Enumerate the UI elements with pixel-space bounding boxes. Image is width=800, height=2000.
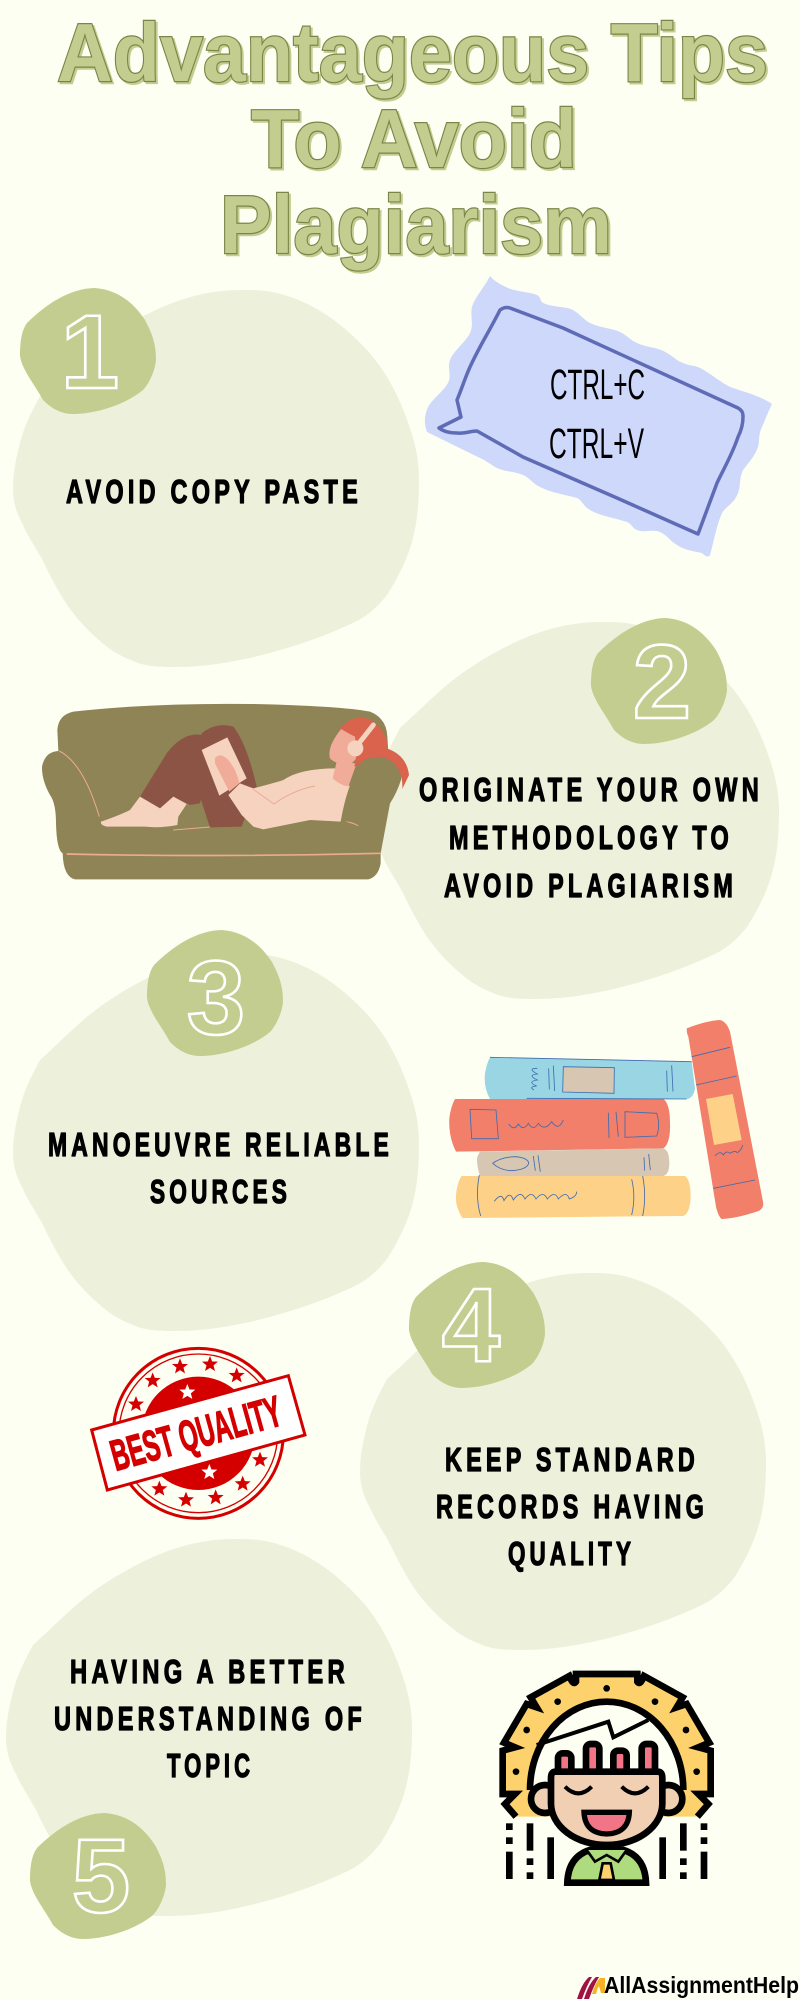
panel: tip 2 (373, 618, 779, 999)
icon: best quality stamp (92, 1348, 305, 1518)
panel: tip 4 (360, 1262, 766, 1650)
panel: tip 5 (6, 1539, 412, 1939)
tip 1 text: AVOID COPY PASTE (66, 473, 362, 510)
panel: tip 3 (13, 930, 419, 1331)
stamp banner (92, 1376, 305, 1490)
tip 4 text: QUALITY (508, 1535, 635, 1572)
number 2: 2 (633, 624, 691, 741)
title: Plagiarism (220, 178, 612, 271)
tip 4 text: KEEP STANDARD (445, 1441, 699, 1478)
number 3: 3 (187, 940, 245, 1057)
number 5: 5 (72, 1818, 130, 1935)
ctrl text (549, 361, 645, 468)
illustration: stack of books (449, 1020, 763, 1219)
tip 5 text: TOPIC (167, 1747, 254, 1784)
tip 3 text (48, 1126, 393, 1210)
number 1: 1 (61, 294, 119, 411)
title: To Avoid (251, 92, 577, 185)
panel: tip 1 (13, 288, 419, 667)
tip 3 text: MANOEUVRE RELIABLE (48, 1126, 393, 1163)
icon: happy thinker with gear (503, 1674, 711, 1883)
tip 5 text (54, 1653, 366, 1784)
tip 4 text (436, 1441, 708, 1572)
illustration: person reading on sofa (42, 704, 409, 879)
tip 3 text: SOURCES (150, 1173, 291, 1210)
tip 5 text: UNDERSTANDING OF (54, 1700, 366, 1737)
ctrl text: CTRL+V (549, 420, 644, 468)
bubble outline (439, 307, 743, 534)
title: Advantageous Tips (57, 6, 768, 99)
number 4: 4 (442, 1267, 500, 1384)
ctrl text: CTRL+C (550, 361, 645, 409)
icon: speech bubble with ctrl keys (425, 276, 772, 556)
tip 2 text (419, 771, 763, 904)
tip 5 text: HAVING A BETTER (70, 1653, 349, 1690)
stamp banner: BEST QUALITY (106, 1388, 287, 1481)
title (57, 6, 768, 271)
